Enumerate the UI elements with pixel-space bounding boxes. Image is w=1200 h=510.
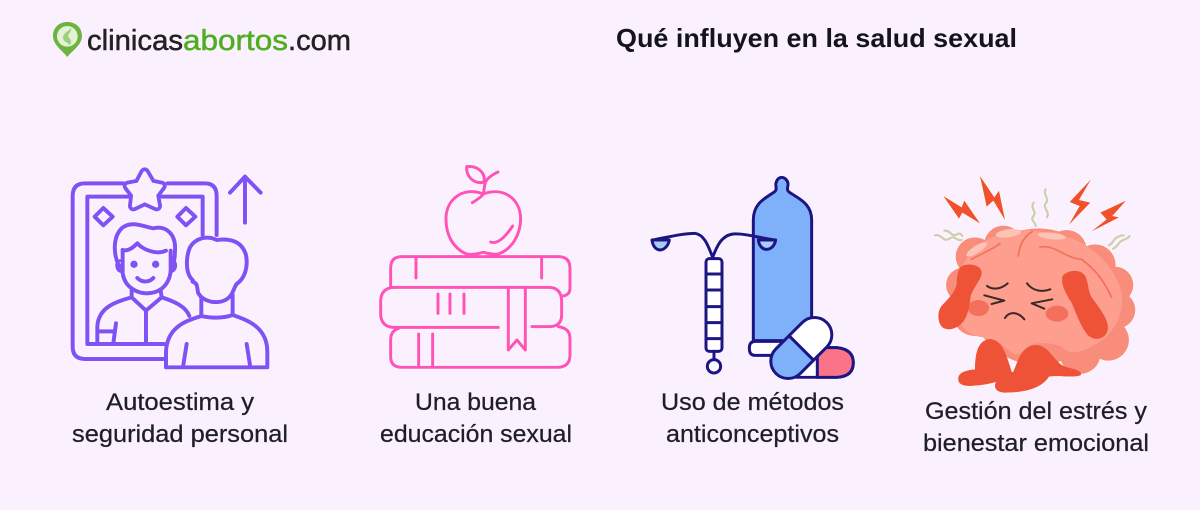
icon: green map pin — [53, 22, 82, 57]
label: Uso de métodos anticonceptivos: Uso de métodos — [661, 389, 844, 416]
IUD device — [652, 233, 776, 373]
logo text: .com — [288, 25, 351, 57]
condom — [749, 177, 812, 355]
legs — [958, 339, 1081, 393]
brain shine — [965, 228, 1066, 259]
label: Uso de métodos anticonceptivos — [661, 389, 844, 448]
face — [984, 283, 1052, 319]
logo text: clinicas — [87, 25, 183, 57]
icon: portrait in mirror with person, star and up arrow — [73, 173, 267, 367]
arms — [938, 264, 1108, 339]
pills — [764, 310, 853, 386]
label: Uso de métodos anticonceptivos: anticonceptivos — [666, 421, 839, 448]
cheeks — [968, 300, 1068, 322]
brain folds — [972, 232, 1112, 297]
brain body — [946, 226, 1135, 374]
label: Autoestima y seguridad personal: Autoestima y — [106, 389, 254, 416]
label: Autoestima y seguridad personal — [72, 389, 288, 448]
label: Una buena educación sexual: Una buena — [415, 389, 537, 416]
label: Autoestima y seguridad personal: seguridad personal — [72, 421, 288, 448]
label: Una buena educación sexual — [380, 389, 572, 448]
icon: contraceptive methods — [652, 177, 853, 386]
logo text — [87, 25, 351, 57]
icon: stressed brain character — [935, 176, 1135, 393]
label: Una buena educación sexual: educación sexual — [380, 421, 572, 448]
brain inner highlight — [955, 230, 1122, 354]
title: Qué influyen en la salud sexual — [616, 23, 1017, 53]
label: Gestión del estrés y bienestar emocional — [923, 398, 1149, 457]
stress squiggles — [935, 189, 1130, 249]
label: Gestión del estrés y bienestar emocional: bienestar emocional — [923, 430, 1149, 457]
icon: apple on stack of books — [381, 167, 570, 367]
lightning bolts — [943, 176, 1126, 231]
logo text: abortos — [183, 25, 288, 57]
label: Gestión del estrés y bienestar emocional: Gestión del estrés y — [925, 398, 1147, 425]
logo: clinicasabortos.com — [53, 22, 351, 57]
